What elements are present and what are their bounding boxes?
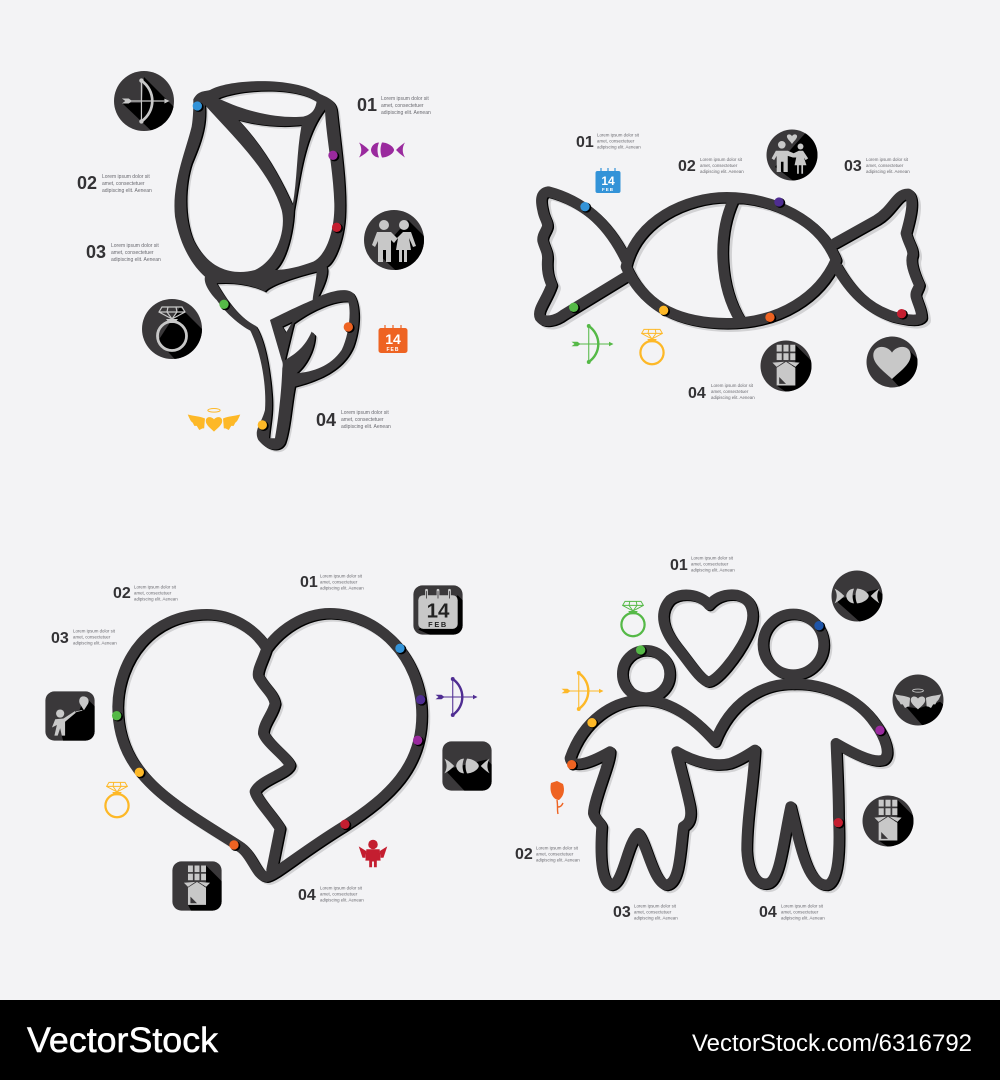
icon: calendar tile: 14 <box>427 599 450 622</box>
text block: heart 01: Lorem ipsum dolor sit <box>320 574 363 578</box>
text block: couple 02: Lorem ipsum dolor sit <box>536 846 579 850</box>
text block: rose 03: adipiscing elit. Aenean <box>111 257 161 263</box>
text block: heart 01: adipiscing elit. Aenean <box>320 586 364 590</box>
icon: yellow ring <box>640 329 664 364</box>
text block: heart 03: adipiscing elit. Aenean <box>73 640 117 646</box>
text block: rose 04 <box>316 410 391 430</box>
text block: heart 02: Lorem ipsum dolor sit <box>134 584 177 590</box>
icon: orange rose <box>550 781 564 814</box>
text block: rose 04: adipiscing elit. Aenean <box>341 424 391 430</box>
text block: couple 03: Lorem ipsum dolor sit <box>634 904 677 908</box>
icon: bow in circle <box>114 71 174 131</box>
text block: couple 01: Lorem ipsum dolor sit <box>691 556 734 560</box>
text block: rose 03: Lorem ipsum dolor sit <box>111 243 159 249</box>
text block: couple 03: adipiscing elit. Aenean <box>634 916 678 920</box>
text block: couple 04: adipiscing elit. Aenean <box>781 916 825 920</box>
panel: couple infographic <box>515 556 952 921</box>
text block: candy 01: 01 <box>576 134 594 151</box>
text block: rose 01: adipiscing elit. Aenean <box>381 110 431 116</box>
text block: couple 03 <box>613 904 678 921</box>
text block: candy 04: adipiscing elit. Aenean <box>711 395 755 400</box>
icon: balloon figure tile <box>45 691 95 741</box>
text block: candy 03: amet, consectetuer <box>866 163 904 168</box>
text block: candy 02: amet, consectetuer <box>700 163 738 168</box>
icon: blue calendar: 14 <box>601 174 615 188</box>
text block: heart 02: 02 <box>113 585 131 602</box>
icon: purple candy <box>359 142 405 158</box>
icon: ring in circle <box>142 299 202 359</box>
text block: heart 01: amet, consectetuer <box>320 580 358 584</box>
text block: rose 02: amet, consectetuer <box>102 181 145 187</box>
text block: candy 01: adipiscing elit. Aenean <box>597 144 641 150</box>
text block: candy 03: Lorem ipsum dolor sit <box>866 157 909 162</box>
text block: rose 04: Lorem ipsum dolor sit <box>341 410 389 416</box>
panel: broken heart infographic <box>45 574 500 919</box>
footer logo: VectorStock <box>27 1021 219 1060</box>
text block: rose 01: Lorem ipsum dolor sit <box>381 96 429 102</box>
rose outline <box>174 81 362 452</box>
text block: candy 03 <box>844 157 910 175</box>
text block: couple 04: Lorem ipsum dolor sit <box>781 904 824 908</box>
text block: heart 03: 03 <box>51 630 69 647</box>
text block: rose 02: adipiscing elit. Aenean <box>102 188 152 194</box>
text block: rose 03 <box>86 242 161 263</box>
text block: candy 01 <box>576 132 641 151</box>
text block: candy 04: amet, consectetuer <box>711 389 749 394</box>
text block: couple 02: adipiscing elit. Aenean <box>536 858 580 862</box>
text block: candy 04: Lorem ipsum dolor sit <box>711 383 754 388</box>
footer banner <box>0 1000 1000 1080</box>
text block: candy 02 <box>678 157 744 175</box>
icon: calendar tile <box>413 585 463 635</box>
icon: yellow winged heart <box>188 409 240 432</box>
text block: couple 03: 03 <box>613 904 631 921</box>
icon: chocolate tile <box>172 861 222 911</box>
text block: heart 02: adipiscing elit. Aenean <box>134 596 178 602</box>
icon: winged heart in circle <box>892 674 944 726</box>
text block: candy 04: 04 <box>688 385 706 402</box>
heart outline <box>112 613 427 880</box>
icon: couple with heart in circle <box>766 130 818 180</box>
icon: green bow <box>572 324 614 364</box>
text block: heart 03 <box>51 628 117 647</box>
icon: couple in circle <box>364 210 424 270</box>
icon: blue calendar <box>596 168 620 193</box>
text block: candy 03: adipiscing elit. Aenean <box>866 169 910 174</box>
text block: candy 02: adipiscing elit. Aenean <box>700 169 744 174</box>
text block: rose 03: amet, consectetuer <box>111 250 154 256</box>
text block: couple 01 <box>670 556 735 574</box>
icon: heart in circle <box>866 336 918 388</box>
text block: heart 04: 04 <box>298 887 316 904</box>
icon: orange calendar <box>378 325 408 353</box>
text block: rose 04: amet, consectetuer <box>341 417 384 423</box>
icon: calendar tile: FEB <box>428 620 448 629</box>
text block: rose 01 <box>357 95 431 116</box>
text block: couple 04: amet, consectetuer <box>781 910 819 914</box>
text block: candy 02: Lorem ipsum dolor sit <box>700 157 743 162</box>
text block: couple 02: amet, consectetuer <box>536 852 574 856</box>
icon: candy in circle <box>832 570 882 622</box>
text block: heart 03: Lorem ipsum dolor sit <box>73 628 116 634</box>
icon: chocolate in circle <box>760 340 812 392</box>
text block: heart 02: amet, consectetuer <box>134 590 172 596</box>
panel: candy infographic <box>539 130 926 402</box>
icon: yellow bow <box>562 671 604 711</box>
text block: rose 03: 03 <box>86 242 106 262</box>
text block: heart 04: Lorem ipsum dolor sit <box>320 886 363 890</box>
text block: heart 01 <box>300 574 364 591</box>
text block: candy 02: 02 <box>678 158 696 175</box>
panel: rose infographic <box>77 71 434 452</box>
text block: couple 02: 02 <box>515 846 533 863</box>
text block: heart 04 <box>298 886 364 904</box>
text block: couple 03: amet, consectetuer <box>634 910 672 914</box>
text block: rose 02: 02 <box>77 173 97 193</box>
icon: indigo bow <box>436 677 478 717</box>
icon: red cupid <box>359 840 387 867</box>
text block: heart 03: amet, consectetuer <box>73 634 111 640</box>
icon: blue calendar: FEB <box>602 187 614 192</box>
text block: candy 04 <box>688 383 755 402</box>
icon: orange calendar: FEB <box>386 347 400 353</box>
text block: rose 02: Lorem ipsum dolor sit <box>102 174 150 180</box>
icon: chocolate in circle <box>862 796 914 846</box>
text block: rose 04: 04 <box>316 410 336 430</box>
footer url: VectorStock.com/6316792 <box>692 1030 972 1057</box>
text block: candy 03: 03 <box>844 158 862 175</box>
icon: yellow ring <box>105 782 129 817</box>
text block: rose 02 <box>77 173 152 194</box>
text block: couple 01: 01 <box>670 557 688 574</box>
couple outline <box>567 595 890 888</box>
icon: orange calendar: 14 <box>385 331 401 347</box>
icon: green ring <box>621 601 645 636</box>
text block: candy 01: Lorem ipsum dolor sit <box>597 132 640 138</box>
text block: couple 01: adipiscing elit. Aenean <box>691 568 735 572</box>
text block: heart 04: adipiscing elit. Aenean <box>320 898 364 902</box>
text block: candy 01: amet, consectetuer <box>597 138 635 144</box>
candy outline <box>539 192 926 327</box>
text block: rose 01: 01 <box>357 95 377 115</box>
text block: couple 01: amet, consectetuer <box>691 562 729 566</box>
text block: heart 01: 01 <box>300 574 318 591</box>
text block: heart 02 <box>113 584 178 602</box>
text block: rose 01: amet, consectetuer <box>381 103 424 109</box>
text block: couple 04 <box>759 904 825 921</box>
text block: couple 04: 04 <box>759 904 777 921</box>
icon: candy tile <box>442 741 492 791</box>
text block: heart 04: amet, consectetuer <box>320 892 358 896</box>
text block: couple 02 <box>515 846 580 863</box>
